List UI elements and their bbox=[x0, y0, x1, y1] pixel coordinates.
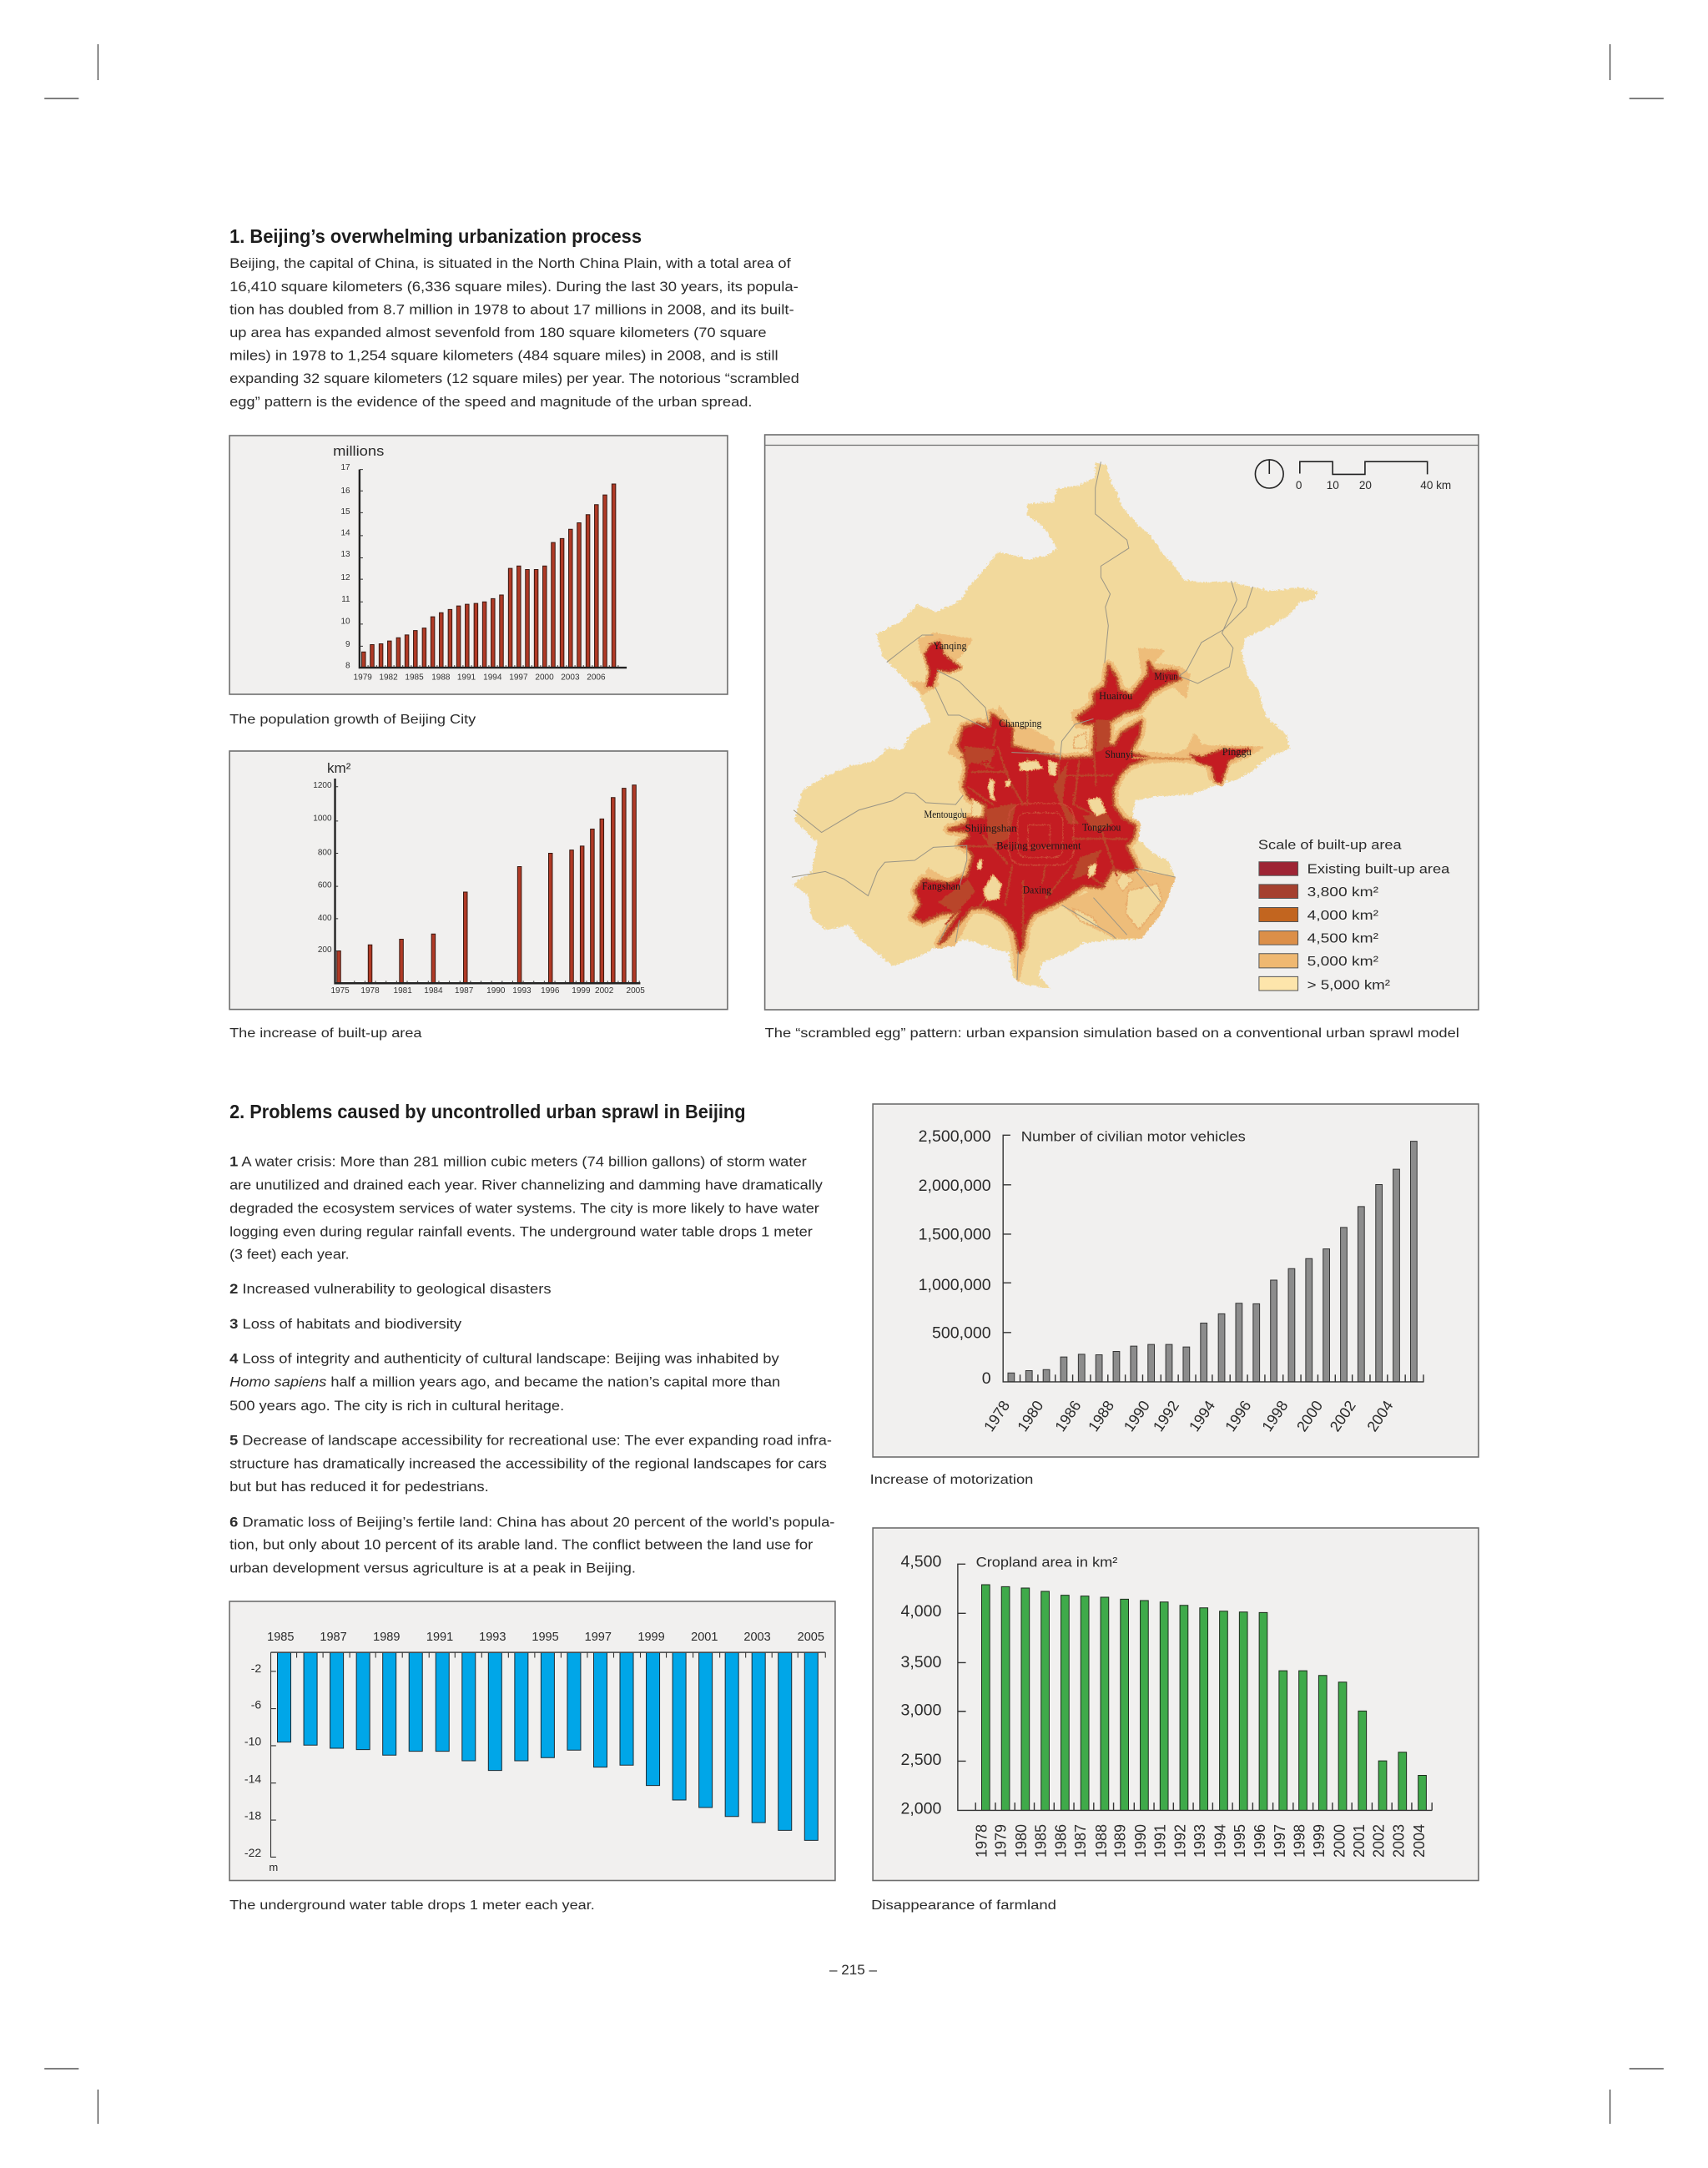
x axis labels: population: 1997 bbox=[509, 673, 528, 682]
x axis labels: population: 1991 bbox=[457, 673, 476, 682]
legend text bbox=[1258, 838, 1449, 992]
x axis labels: population: 1994 bbox=[483, 673, 502, 682]
chart title: vehicles: Number of civilian motor vehicles bbox=[1021, 1129, 1246, 1144]
x axis labels: cropland: 2001 bbox=[1351, 1824, 1368, 1858]
x axis labels: vehicles: 1996 bbox=[1222, 1398, 1254, 1434]
map place labels: Fangshan bbox=[922, 880, 961, 892]
x axis labels: cropland: 1985 bbox=[1033, 1824, 1050, 1858]
map: ring roads and arterials bbox=[945, 729, 1127, 942]
y axis labels: built-up area: 800 bbox=[318, 849, 332, 857]
panel: water table chart bbox=[229, 1601, 835, 1881]
y axis labels: water table: -6 bbox=[251, 1698, 261, 1711]
x axis labels: built-up area: 1996 bbox=[541, 986, 560, 996]
bars: population bbox=[362, 484, 616, 668]
map: existing built-up core bbox=[913, 661, 1179, 951]
y axis labels: population: 17 bbox=[341, 463, 350, 472]
caption: motorization: Increase of motorization bbox=[870, 1472, 1033, 1487]
x axis labels: cropland: 1995 bbox=[1232, 1824, 1248, 1858]
x axis labels: cropland: 1979 bbox=[992, 1824, 1010, 1858]
y axis labels: population: 15 bbox=[341, 507, 350, 517]
x axis labels: cropland: 1994 bbox=[1212, 1824, 1228, 1858]
x axis labels: water table: 1997 bbox=[585, 1631, 612, 1644]
panel: cropland chart bbox=[873, 1528, 1479, 1881]
y axis labels: built-up area: 200 bbox=[318, 945, 332, 955]
y axis labels: vehicles: 2,500,000 bbox=[919, 1127, 991, 1146]
y axis labels: built-up area: 400 bbox=[318, 914, 332, 923]
page number: – 215 – bbox=[829, 1962, 877, 1978]
y axis labels: vehicles: 1,500,000 bbox=[919, 1226, 991, 1243]
text block: section 2 problems list: but but has reduced it for pedestrians. bbox=[229, 1479, 489, 1495]
x axis labels: vehicles: 1994 bbox=[1186, 1398, 1218, 1434]
y axis labels: built-up area: 1200 bbox=[313, 781, 332, 790]
x axis labels: built-up area: 1993 bbox=[512, 986, 532, 996]
text block: section 2 problems list: are unutilized and drained each year. River channelizing and damming have dramatically bbox=[229, 1177, 824, 1192]
x axis labels: cropland: 1997 bbox=[1272, 1824, 1288, 1858]
panel: scrambled egg map bbox=[765, 435, 1479, 1010]
caption: water table: The underground water table drops 1 meter each year. bbox=[229, 1898, 595, 1913]
map place labels: Miyun bbox=[1154, 671, 1178, 682]
text block: section 2 problems list: 5 Decrease of landscape accessibility for recreational use: The ever expanding road infra- bbox=[229, 1433, 832, 1448]
y axis labels: population: 9 bbox=[345, 640, 350, 649]
caption: built-up area: The increase of built-up area bbox=[229, 1026, 422, 1041]
y axis labels: built-up area bbox=[313, 781, 332, 955]
text block: section 2 problems list: urban development versus agriculture is at a peak in Beijing. bbox=[229, 1560, 636, 1576]
scale bar labels: 20 bbox=[1359, 479, 1372, 492]
map place labels: Yanqing bbox=[933, 640, 967, 652]
panel: motor vehicles chart bbox=[873, 1104, 1479, 1457]
legend text: 3,800 km² bbox=[1307, 885, 1379, 900]
y axis labels: vehicles: 0 bbox=[982, 1369, 991, 1388]
map place labels: Shijingshan bbox=[965, 823, 1018, 834]
x axis labels: cropland: 1992 bbox=[1171, 1824, 1188, 1858]
chart title: cropland: Cropland area in km² bbox=[976, 1555, 1118, 1570]
x axis labels: cropland: 2004 bbox=[1411, 1824, 1428, 1858]
x axis labels: water table: 1985 bbox=[267, 1631, 295, 1644]
text block: section 1 intro: egg” pattern is the evidence of the speed and magnitude of the urban spread. bbox=[229, 394, 753, 410]
text block: section 2 problems list: 6 Dramatic loss of Beijing’s fertile land: China has about 20 percent of the world’s popula- bbox=[229, 1515, 834, 1530]
text block: section 1 intro: expanding 32 square kilometers (12 square miles) per year. The notorious “scrambled bbox=[229, 371, 799, 386]
x axis labels: cropland: 1990 bbox=[1132, 1824, 1149, 1858]
y axis labels: cropland: 3,000 bbox=[900, 1702, 942, 1719]
scale bar labels: 40 km bbox=[1420, 479, 1451, 492]
x axis labels: population: 1985 bbox=[405, 673, 424, 682]
y axis labels: population: 10 bbox=[341, 618, 350, 626]
x axis labels: cropland: 1980 bbox=[1013, 1824, 1030, 1858]
x axis labels: vehicles: 2002 bbox=[1327, 1398, 1359, 1434]
text block: section 1 intro: Beijing, the capital of China, is situated in the North China Plain, with a total area of bbox=[229, 255, 791, 271]
x axis labels: water table: 1999 bbox=[637, 1631, 665, 1644]
y axis labels: cropland: 4,000 bbox=[900, 1602, 942, 1621]
scale bar bbox=[1300, 461, 1428, 474]
y axis labels: water table: -18 bbox=[244, 1809, 261, 1822]
map place labels bbox=[922, 640, 1252, 895]
x axis labels: population: 2000 bbox=[535, 673, 554, 682]
y axis labels: population: 11 bbox=[341, 595, 350, 604]
bars: water table bbox=[278, 1652, 818, 1840]
text block: section 2 problems list: logging even during regular rainfall events. The underground water table drops 1 meter bbox=[229, 1224, 813, 1239]
y axis labels: built-up area: 600 bbox=[318, 881, 332, 890]
x axis labels: built-up area: 1987 bbox=[455, 986, 474, 996]
x axis labels: vehicles bbox=[980, 1398, 1397, 1434]
y axis labels: population: 16 bbox=[341, 487, 350, 496]
x axis labels: vehicles: 1990 bbox=[1121, 1398, 1153, 1434]
text block: section 2 problems list: 3 Loss of habitats and biodiversity bbox=[229, 1316, 462, 1332]
caption: map: The “scrambled egg” pattern: urban expansion simulation based on a conventional urban sprawl model bbox=[765, 1026, 1459, 1041]
legend text: 4,000 km² bbox=[1307, 908, 1379, 923]
x axis labels: vehicles: 2004 bbox=[1363, 1398, 1397, 1434]
x axis labels: built-up area: 1975 bbox=[330, 986, 350, 996]
map place labels: Mentougou bbox=[924, 809, 967, 820]
map: brown urban fabric patches bbox=[937, 718, 1112, 913]
x axis labels: built-up area: 1984 bbox=[424, 986, 443, 996]
x axis labels: population bbox=[354, 673, 606, 682]
text block: section 2 problems list: Homo sapiens half a million years ago, and became the nation’s capital more than bbox=[229, 1374, 780, 1389]
unit label: millions: millions bbox=[333, 443, 384, 459]
x axis labels: built-up area bbox=[330, 986, 645, 996]
x axis labels: cropland bbox=[974, 1824, 1428, 1858]
x axis labels: cropland: 1987 bbox=[1072, 1824, 1089, 1858]
text block: section 1 intro: tion has doubled from 8.7 million in 1978 to about 17 millions in 2008, and its built- bbox=[229, 302, 794, 317]
map: built-up expansion zones bbox=[911, 633, 1261, 980]
x axis labels: water table: 1993 bbox=[479, 1631, 506, 1644]
text block: section 2 problems list: 2 Increased vulnerability to geological disasters bbox=[229, 1281, 552, 1297]
legend text: Scale of built-up area bbox=[1258, 838, 1402, 852]
x axis labels: water table: 1987 bbox=[320, 1631, 347, 1644]
y axis labels: cropland: 2,000 bbox=[900, 1800, 942, 1818]
text block: section 2 problems list: degraded the ecosystem services of water systems. The city is more likely to have water bbox=[229, 1201, 819, 1216]
x axis labels: population: 2006 bbox=[587, 673, 606, 682]
text block: section 2 problems list: (3 feet) each year. bbox=[229, 1247, 350, 1262]
scale bar labels: 10 bbox=[1327, 479, 1339, 492]
x axis labels: built-up area: 1981 bbox=[394, 986, 412, 996]
unit label: km2: km² bbox=[327, 760, 351, 776]
x axis labels: vehicles: 2000 bbox=[1293, 1398, 1326, 1434]
x axis labels: cropland: 2002 bbox=[1370, 1824, 1388, 1858]
text block: section 1 intro bbox=[229, 255, 799, 410]
x axis labels: population: 1988 bbox=[431, 673, 451, 682]
map place labels: Shunyi bbox=[1105, 749, 1134, 760]
y axis labels: population bbox=[341, 463, 350, 670]
text block: section 1 intro: 16,410 square kilometers (6,336 square miles). During the last 30 years, its popula- bbox=[229, 279, 799, 295]
bars: cropland bbox=[981, 1585, 1426, 1810]
legend text: 5,000 km² bbox=[1307, 954, 1379, 969]
text block: section 2 problems list bbox=[229, 1154, 834, 1576]
x axis labels: vehicles: 1980 bbox=[1014, 1398, 1046, 1434]
x axis labels: cropland: 1986 bbox=[1052, 1824, 1069, 1858]
y axis labels: cropland bbox=[900, 1553, 942, 1818]
x axis labels: built-up area: 1990 bbox=[486, 986, 506, 996]
x axis labels: water table: 1995 bbox=[532, 1631, 559, 1644]
legend text: Existing built-up area bbox=[1307, 862, 1449, 876]
map place labels: Huairou bbox=[1099, 690, 1133, 702]
x axis labels: cropland: 1988 bbox=[1093, 1824, 1110, 1858]
map place labels: Beijing government bbox=[996, 840, 1081, 851]
text block: section 2 problems list: tion, but only about 10 percent of its arable land. The conflict between the land use for bbox=[229, 1537, 814, 1552]
scale bar labels: 0 bbox=[1296, 479, 1302, 492]
scale bar labels bbox=[1296, 479, 1451, 492]
x axis labels: population: 1979 bbox=[354, 673, 372, 682]
map place labels: Changping bbox=[999, 718, 1042, 729]
bars: built-up area bbox=[337, 785, 636, 983]
text block: section 1 intro: miles) in 1978 to 1,254 square kilometers (484 square miles) in 2008, and is still bbox=[229, 348, 778, 363]
x axis labels: population: 2003 bbox=[561, 673, 580, 682]
map: halo around the built-up core bbox=[913, 661, 1179, 951]
y axis labels: cropland: 3,500 bbox=[900, 1653, 942, 1671]
y axis labels: vehicles: 2,000,000 bbox=[919, 1177, 991, 1195]
y axis labels: water table: -2 bbox=[251, 1661, 261, 1675]
y axis labels: population: 8 bbox=[345, 662, 350, 670]
x axis labels: cropland: 2000 bbox=[1331, 1824, 1348, 1858]
x axis labels: vehicles: 1992 bbox=[1150, 1398, 1182, 1434]
heading: section 1: 1. Beijing’s overwhelming urbanization process bbox=[229, 225, 642, 247]
map place labels: Tongzhou bbox=[1082, 822, 1121, 833]
legend swatches bbox=[1259, 862, 1298, 991]
y axis labels: cropland: 2,500 bbox=[900, 1751, 942, 1769]
y axis labels: cropland: 4,500 bbox=[900, 1553, 942, 1571]
x axis labels: built-up area: 2005 bbox=[627, 986, 645, 996]
y axis labels: water table: -22 bbox=[244, 1846, 261, 1859]
caption: population growth: The population growth of Beijing City bbox=[229, 712, 476, 727]
caption: farmland: Disappearance of farmland bbox=[871, 1898, 1056, 1913]
x axis labels: vehicles: 1998 bbox=[1258, 1398, 1292, 1434]
x axis labels: vehicles: 1986 bbox=[1051, 1398, 1085, 1434]
compass bbox=[1255, 460, 1283, 488]
map place labels: Daxing bbox=[1023, 885, 1052, 895]
y axis labels: population: 13 bbox=[341, 550, 350, 559]
heading: section 2: 2. Problems caused by uncontrolled urban sprawl in Beijing bbox=[229, 1101, 746, 1122]
map: rivers and highways bbox=[792, 461, 1252, 980]
unit label: m: m bbox=[269, 1861, 278, 1873]
y axis labels: built-up area: 1000 bbox=[313, 814, 332, 823]
x axis labels: cropland: 1993 bbox=[1192, 1824, 1208, 1858]
panel: built-up area chart bbox=[229, 751, 728, 1010]
y axis labels: water table: -14 bbox=[244, 1772, 261, 1785]
x axis labels: cropland: 1999 bbox=[1311, 1824, 1328, 1858]
y axis labels: population: 12 bbox=[341, 573, 350, 582]
x axis labels: cropland: 1989 bbox=[1112, 1824, 1129, 1858]
panel: population growth chart bbox=[229, 436, 728, 694]
y axis labels: population: 14 bbox=[341, 529, 350, 537]
legend text: > 5,000 km² bbox=[1307, 978, 1391, 992]
x axis labels: vehicles: 1978 bbox=[980, 1398, 1013, 1434]
x axis labels: population: 1982 bbox=[379, 673, 398, 682]
bars: motor vehicles bbox=[1008, 1142, 1417, 1382]
y axis labels: vehicles bbox=[919, 1127, 991, 1388]
map: unbuilt pockets inside the city bbox=[970, 732, 1161, 930]
x axis labels: cropland: 1978 bbox=[974, 1824, 990, 1858]
y axis labels: vehicles: 500,000 bbox=[932, 1324, 991, 1342]
x axis labels: water table bbox=[267, 1631, 824, 1644]
text block: section 1 intro: up area has expanded almost sevenfold from 180 square kilometers (70 square bbox=[229, 325, 767, 340]
x axis labels: cropland: 1996 bbox=[1252, 1824, 1268, 1858]
x axis labels: cropland: 2003 bbox=[1391, 1824, 1408, 1858]
x axis labels: water table: 2003 bbox=[743, 1631, 771, 1644]
map: Beijing municipality outline bbox=[792, 461, 1317, 987]
y axis labels: water table bbox=[244, 1661, 261, 1859]
map: satellite towns bbox=[924, 641, 1250, 782]
x axis labels: cropland: 1991 bbox=[1151, 1824, 1168, 1858]
map place labels: Pinggu bbox=[1222, 746, 1252, 758]
legend text: 4,500 km² bbox=[1307, 931, 1379, 945]
x axis labels: water table: 1991 bbox=[426, 1631, 453, 1644]
x axis labels: built-up area: 1999 bbox=[572, 986, 591, 996]
text block: section 2 problems list: structure has dramatically increased the accessibility of the regional landscapes for cars bbox=[229, 1456, 827, 1471]
x axis labels: vehicles: 1988 bbox=[1085, 1398, 1117, 1434]
text block: section 2 problems list: 4 Loss of integrity and authenticity of cultural landscape: Beijing was inhabited by bbox=[229, 1351, 779, 1366]
x axis labels: built-up area: 1978 bbox=[360, 986, 380, 996]
y axis labels: water table: -10 bbox=[244, 1735, 261, 1747]
x axis labels: built-up area: 2002 bbox=[595, 986, 614, 996]
y axis labels: vehicles: 1,000,000 bbox=[919, 1276, 991, 1294]
x axis labels: cropland: 1998 bbox=[1291, 1824, 1307, 1858]
x axis labels: water table: 2001 bbox=[691, 1631, 718, 1644]
x axis labels: water table: 2005 bbox=[798, 1631, 824, 1644]
text block: section 2 problems list: 500 years ago. The city is rich in cultural heritage. bbox=[229, 1398, 564, 1414]
text block: section 2 problems list: 1 A water crisis: More than 281 million cubic meters (74 billion gallons) of storm water bbox=[229, 1154, 807, 1169]
x axis labels: water table: 1989 bbox=[373, 1631, 400, 1644]
